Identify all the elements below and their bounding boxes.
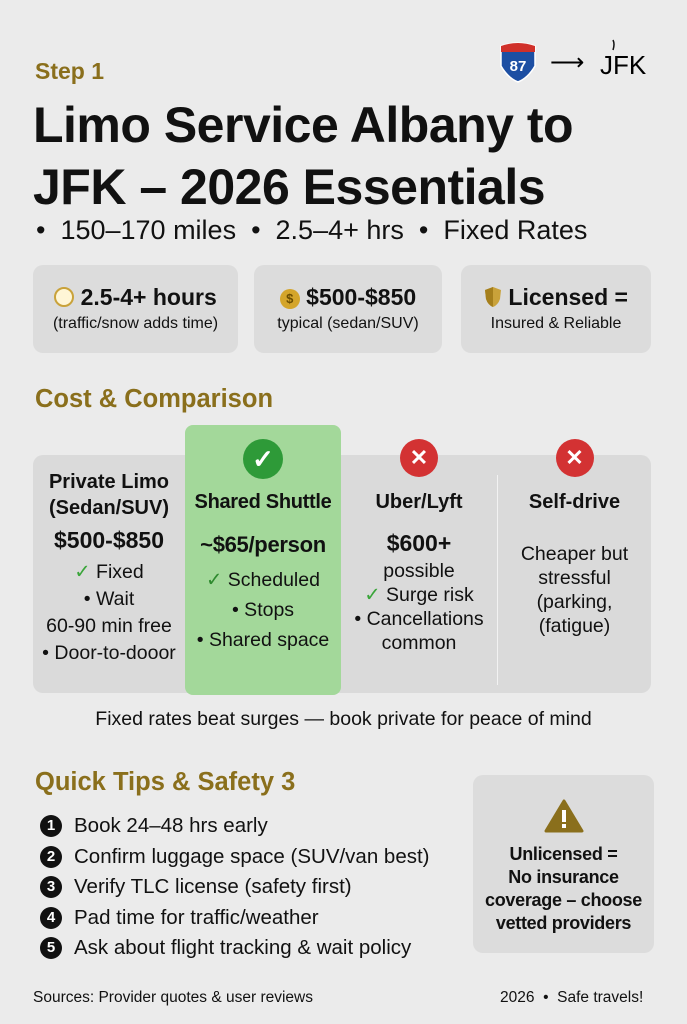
column: uber/lyft [354, 439, 484, 654]
tips list: 3 [47, 878, 55, 895]
tips list: Confirm luggage space (SUV/van best) [74, 844, 430, 868]
tips list: 5 [47, 939, 55, 956]
card: time: 2.5-4+ hours [81, 284, 217, 310]
tips list: Verify TLC license (safety first) [74, 875, 352, 898]
card: cost [254, 265, 442, 353]
card: licensed: Insured & Reliable [491, 315, 621, 332]
icon: route 87 to JFK: JFK [600, 50, 647, 80]
column: shared shuttle (highlighted): ~$65/person [200, 532, 326, 557]
column: uber/lyft: common [382, 632, 456, 654]
card: cost: $ [286, 291, 293, 306]
column: private limo: ✓ Fixed [74, 561, 144, 583]
warning callout: Unlicensed = [510, 844, 617, 864]
comparison panel [33, 425, 651, 695]
column: private limo: 60-90 min free [46, 615, 172, 637]
column: uber/lyft: possible [383, 560, 455, 582]
tips list: 4 [47, 908, 55, 926]
caption: Fixed rates beat surges — book private for peace of mind [95, 708, 592, 730]
tips list: 2 [47, 848, 55, 864]
tips list: Book 24–48 hrs early [74, 814, 268, 837]
column: self-drive: (fatigue) [539, 615, 610, 637]
warning callout: vetted providers [496, 913, 631, 933]
column: shared shuttle (highlighted): • Stops [232, 599, 294, 621]
column: self-drive: ✕ [565, 445, 584, 470]
title: Limo Service Albany to [33, 97, 573, 153]
column: self-drive: Self-drive [529, 491, 620, 513]
column: shared shuttle (highlighted) [185, 425, 341, 695]
card: licensed [461, 265, 651, 353]
column: self-drive: Cheaper but [521, 543, 628, 565]
column: uber/lyft: Uber/Lyft [375, 491, 463, 513]
footer: sources: Sources: Provider quotes & user reviews [33, 989, 313, 1006]
column: private limo [42, 471, 176, 664]
footer: sign-off: 2026 • Safe travels! [500, 989, 643, 1006]
section heading: quick tips: Quick Tips & Safety 3 [35, 768, 295, 796]
column: uber/lyft: • Cancellations [354, 608, 484, 630]
column: shared shuttle (highlighted): ✓ [252, 444, 274, 474]
icon: route 87 to JFK: 87 [510, 58, 526, 75]
card: time: (traffic/snow adds time) [53, 315, 218, 332]
column: private limo: • Door-to-dooor [42, 642, 176, 664]
column: self-drive [521, 439, 628, 637]
column: shared shuttle (highlighted): • Shared space [197, 629, 329, 651]
icon: route 87 to JFK: ⟶ [550, 49, 584, 76]
column: uber/lyft: ✕ [410, 445, 428, 470]
column: uber/lyft: $600+ [387, 530, 451, 556]
column: self-drive: (parking, [537, 591, 612, 613]
card: licensed: Licensed = [508, 284, 628, 310]
title: JFK – 2026 Essentials [33, 159, 545, 215]
warning callout: coverage – choose [485, 890, 642, 910]
key facts line: • 150–170 miles • 2.5–4+ hrs • Fixed Rates [36, 215, 587, 245]
column: private limo: Private Limo [49, 471, 169, 493]
column: uber/lyft: ✓ Surge risk [364, 584, 474, 606]
tips list: Pad time for traffic/weather [74, 906, 319, 928]
card: time [33, 265, 238, 353]
column: private limo: • Wait [84, 588, 134, 610]
warning callout [473, 775, 654, 953]
card: cost: typical (sedan/SUV) [277, 315, 419, 332]
icon: route 87 to JFK [500, 40, 647, 83]
column: self-drive: stressful [538, 567, 611, 589]
column: shared shuttle (highlighted): Shared Shuttle [195, 491, 331, 513]
column: shared shuttle (highlighted): ✓ Scheduled [206, 569, 320, 591]
step label: Step 1 [35, 58, 104, 84]
section heading: cost & comparison: Cost & Comparison [35, 385, 273, 413]
tips list: Ask about flight tracking & wait policy [74, 936, 411, 959]
column: private limo: $500-$850 [54, 527, 164, 553]
card: cost: $500-$850 [306, 284, 416, 310]
title [33, 97, 573, 215]
column: private limo: (Sedan/SUV) [49, 497, 169, 519]
warning callout: No insurance [508, 867, 619, 887]
tips list [40, 814, 430, 959]
tips list: 1 [47, 817, 55, 834]
